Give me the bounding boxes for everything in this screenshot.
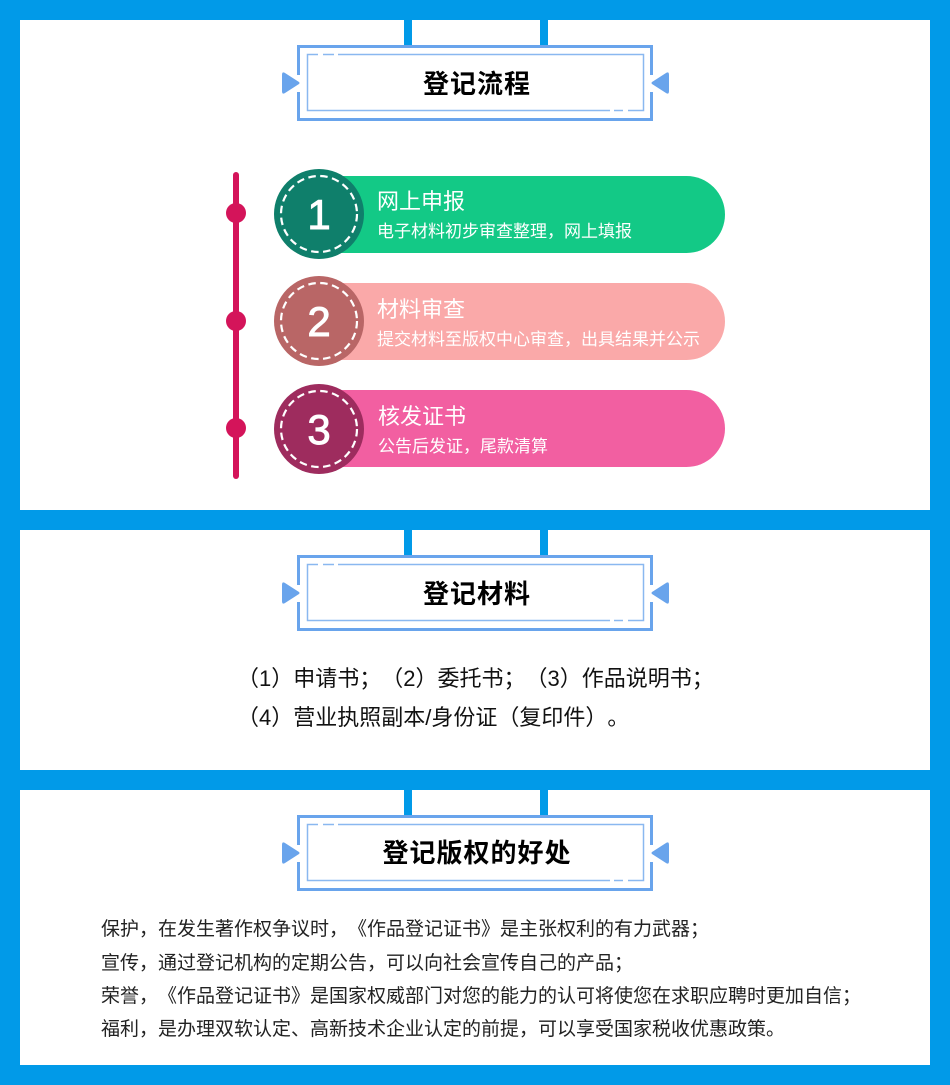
step 3 bbox=[274, 384, 725, 474]
step 3: 核发证书 bbox=[378, 404, 466, 429]
materials list: （4）营业执照副本/身份证（复印件）。 bbox=[237, 705, 629, 730]
panel: registration process bbox=[20, 20, 930, 510]
step 2: 材料审查 bbox=[377, 297, 465, 322]
benefits text: 宣传，通过登记机构的定期公告，可以向社会宣传自己的产品； bbox=[101, 952, 633, 974]
heading frame: benefits of registration: 登记版权的好处 bbox=[382, 838, 572, 868]
step 1 bbox=[274, 169, 725, 259]
heading frame: registration materials bbox=[282, 530, 669, 630]
heading frame: registration process bbox=[282, 20, 669, 120]
step 2 bbox=[274, 276, 725, 366]
step 2: 2 bbox=[307, 298, 331, 345]
step 3: 3 bbox=[307, 406, 331, 453]
heading frame: registration process: 登记流程 bbox=[423, 69, 531, 99]
benefits text: 荣誉，《作品登记证书》是国家权威部门对您的能力的认可将使您在求职应聘时更加自信； bbox=[101, 985, 861, 1007]
panel: registration materials bbox=[20, 530, 930, 770]
panel: benefits of registration bbox=[20, 790, 930, 1065]
step 3: 公告后发证，尾款清算 bbox=[378, 437, 548, 456]
materials list bbox=[237, 666, 714, 730]
step 1: 电子材料初步审查整理，网上填报 bbox=[377, 222, 632, 241]
materials list: （1）申请书；（2）委托书；（3）作品说明书； bbox=[237, 666, 714, 691]
heading frame: benefits of registration bbox=[282, 790, 669, 890]
step 2: 提交材料至版权中心审查，出具结果并公示 bbox=[377, 330, 700, 349]
step 1: 网上申报 bbox=[377, 189, 465, 214]
benefits text bbox=[101, 918, 861, 1040]
benefits text: 福利，是办理双软认定、高新技术企业认定的前提，可以享受国家税收优惠政策。 bbox=[101, 1018, 785, 1040]
timeline bbox=[226, 172, 246, 479]
benefits text: 保护，在发生著作权争议时，《作品登记证书》是主张权利的有力武器； bbox=[101, 918, 709, 940]
heading frame: registration materials: 登记材料 bbox=[423, 579, 531, 609]
step 1: 1 bbox=[307, 191, 331, 238]
